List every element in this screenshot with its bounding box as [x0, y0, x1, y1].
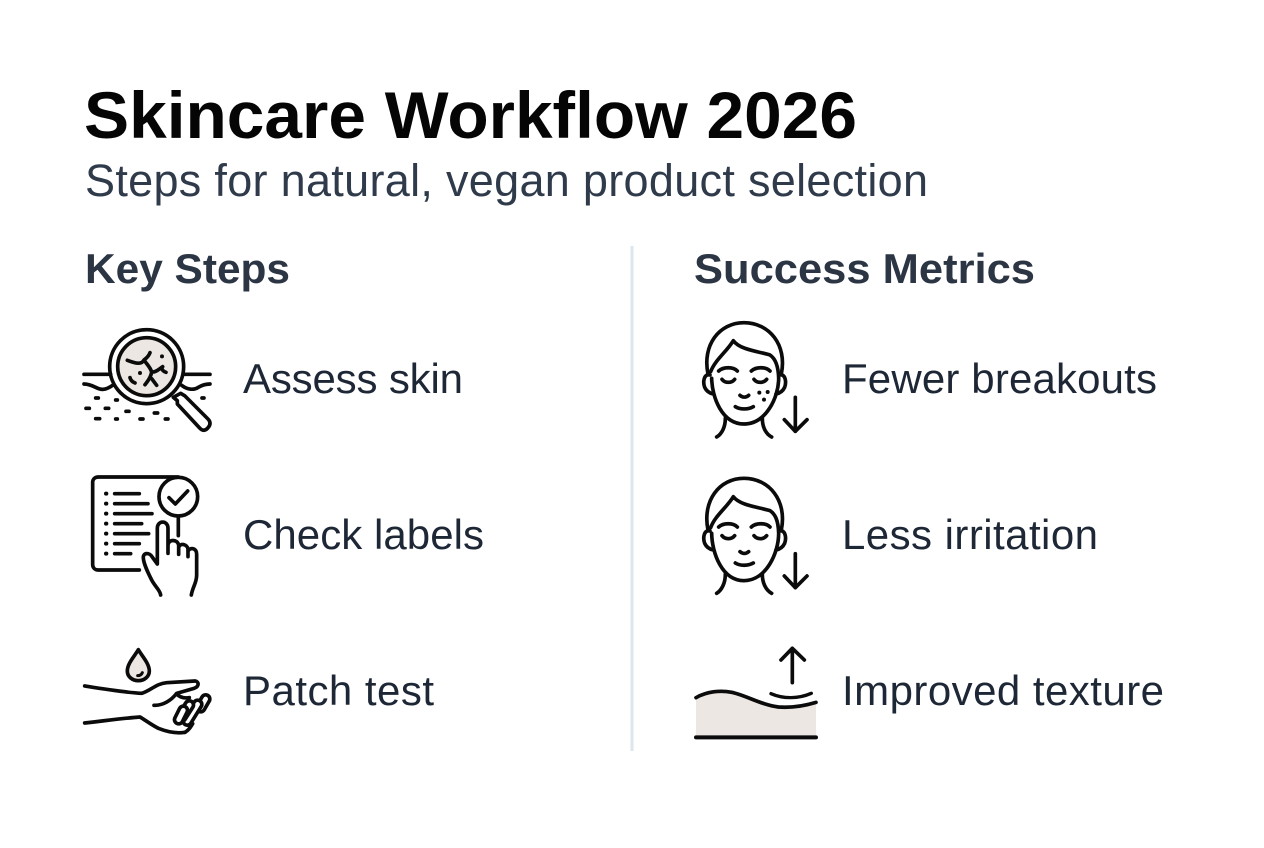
divider: [630, 246, 634, 751]
label: check labels: Check labels: [243, 511, 484, 558]
icon: magnifying glass over skin: [84, 330, 210, 430]
subtitle: Steps for natural, vegan product selection: [85, 155, 928, 206]
icon: face with blemishes and down arrow: [704, 323, 807, 437]
label: improved texture: Improved texture: [842, 667, 1164, 714]
label: patch test: Patch test: [243, 667, 434, 714]
icon: checklist with hand: [93, 477, 198, 595]
heading: key steps: Key Steps: [85, 245, 290, 292]
icon: calm face with down arrow: [704, 478, 807, 593]
icon: hand with drop: [85, 650, 206, 733]
panel: success metrics: [694, 245, 1164, 737]
label: fewer breakouts: Fewer breakouts: [842, 355, 1157, 402]
icon: improved skin texture with up arrow: [696, 648, 816, 737]
label: assess skin: Assess skin: [243, 355, 463, 402]
heading: success metrics: Success Metrics: [694, 245, 1035, 292]
title: Skincare Workflow 2026: [84, 78, 857, 152]
panel: key steps: [84, 245, 484, 733]
label: less irritation: Less irritation: [842, 511, 1098, 558]
